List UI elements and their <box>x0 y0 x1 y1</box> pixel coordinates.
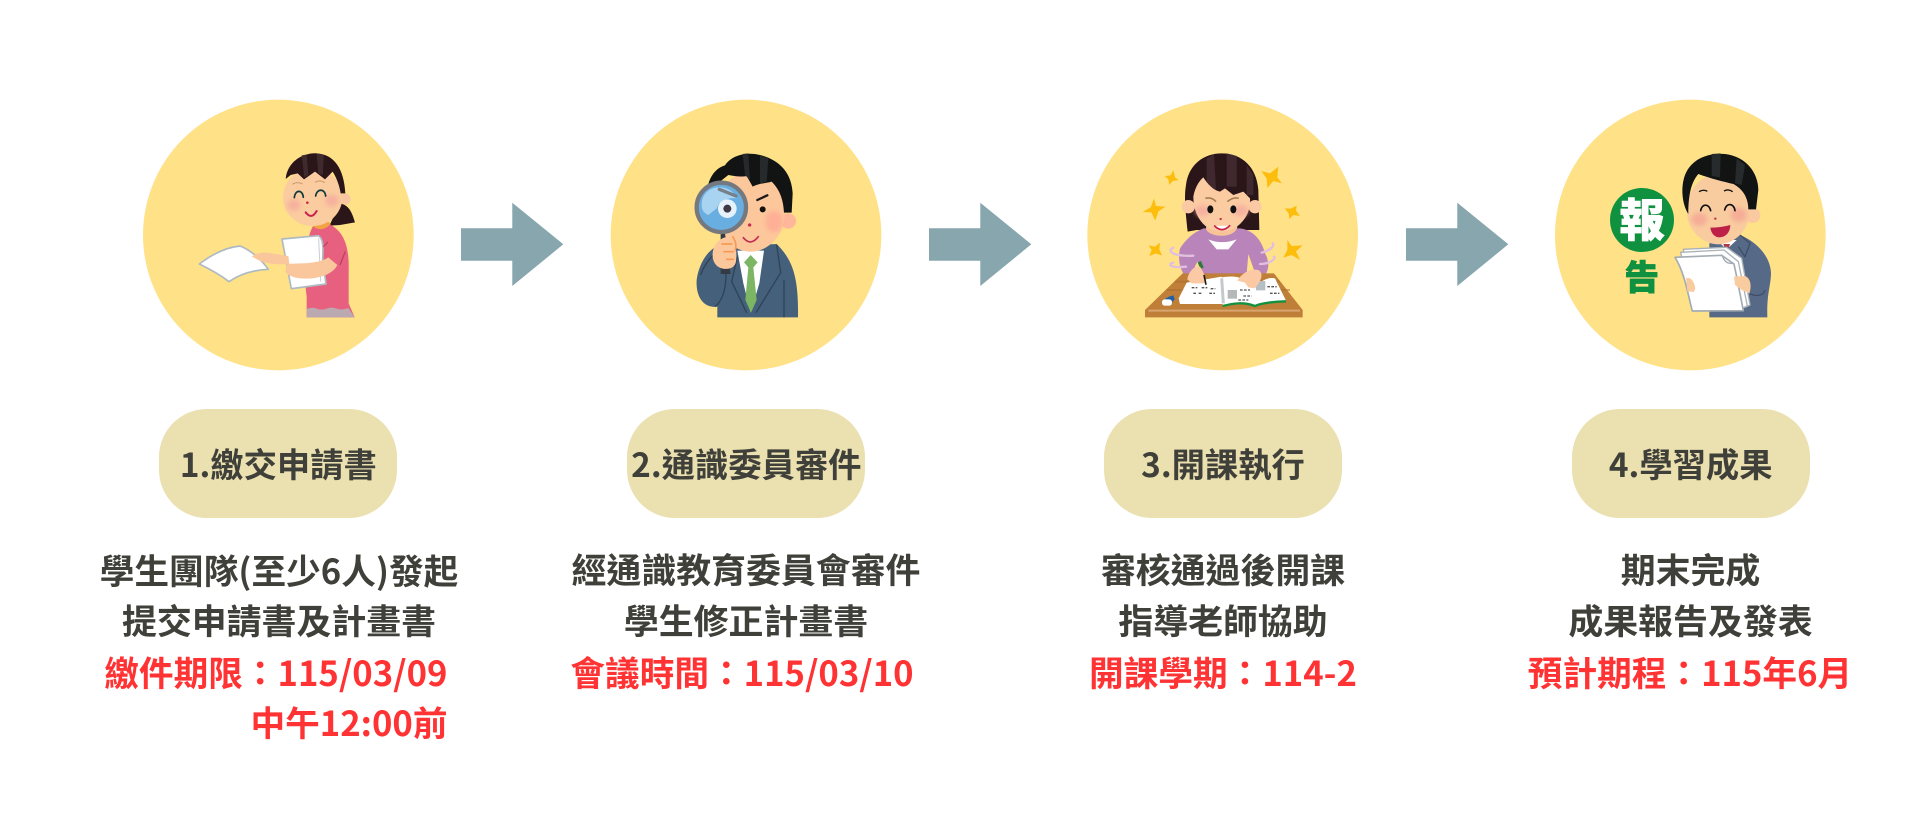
panel: step 1 submit application <box>100 100 458 746</box>
step 4 description: 期末完成 <box>1621 544 1760 594</box>
arrow: step 1 to 2 <box>461 202 564 286</box>
illustration: man presenting report: 告 <box>1624 250 1659 300</box>
step 4 description line 2: 成果報告及發表 <box>1568 595 1813 645</box>
step 2 meeting date: 會議時間：115/03/10 <box>570 646 914 696</box>
panel: step 2 committee review <box>570 100 1358 696</box>
step 3 label pill <box>1104 409 1342 518</box>
panel: step 4 learning outcomes <box>1528 100 1852 696</box>
illustration: man with magnifying glass <box>610 100 882 370</box>
step 3 label pill: 3.開課執行 <box>1141 438 1305 486</box>
step 2 description: 經通識教育委員會審件 <box>572 544 920 594</box>
step 3 description line 2: 指導老師協助 <box>1118 595 1328 645</box>
arrow: step 3 to 4 <box>1406 202 1508 286</box>
step 1 label pill: 1.繳交申請書 <box>180 438 377 486</box>
step 4 schedule: 預計期程：115年6月 <box>1528 646 1852 696</box>
step 1 description line 2: 提交申請書及計畫書 <box>122 595 436 645</box>
step 2 label pill: 2.通識委員審件 <box>631 438 861 486</box>
illustration: girl studying at desk <box>1087 100 1358 370</box>
step 1 description: 學生團隊(至少6人)發起 <box>100 544 458 594</box>
panel: step 3 course execution <box>1087 100 1825 696</box>
illustration: man presenting report <box>1555 100 1826 370</box>
step 1 deadline: 繳件期限：115/03/09 <box>104 646 448 696</box>
step 2 description line 2: 學生修正計畫書 <box>624 595 868 645</box>
arrow: step 2 to 3 <box>929 202 1032 286</box>
illustration: girl handing over papers <box>143 100 414 370</box>
step 4 label pill <box>1572 409 1810 518</box>
illustration: man presenting report: 報 <box>1619 185 1665 251</box>
step 3 semester: 開課學期：114-2 <box>1089 646 1357 696</box>
step 1 deadline time: 中午12:00前 <box>250 696 448 746</box>
step 3 description: 審核通過後開課 <box>1101 544 1345 594</box>
step 2 label pill <box>627 409 865 518</box>
step 1 label pill <box>159 409 397 518</box>
step 4 label pill: 4.學習成果 <box>1609 438 1773 486</box>
